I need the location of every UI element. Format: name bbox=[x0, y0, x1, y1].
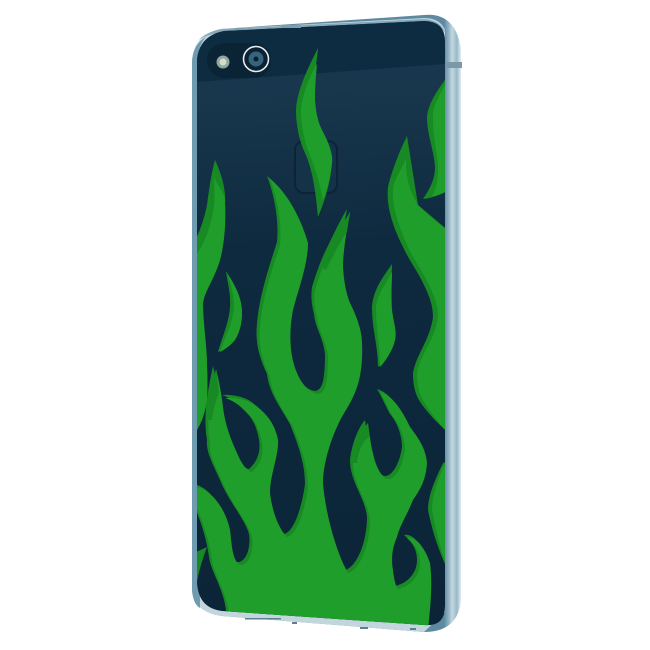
phone back panel bbox=[197, 21, 445, 625]
flame shadow layer bbox=[185, 48, 450, 627]
flame shadow tips bbox=[208, 212, 369, 463]
top camera band bbox=[197, 15, 445, 82]
lower edge buttons and ports bbox=[245, 618, 416, 630]
icon: flash bbox=[216, 56, 230, 68]
icon: camera lens bbox=[244, 46, 268, 72]
fingerprint sensor bbox=[295, 141, 337, 193]
flame main layer bbox=[190, 64, 450, 630]
flame artwork bbox=[185, 48, 450, 630]
top edge buttons bbox=[235, 25, 301, 30]
camera module bbox=[207, 43, 271, 78]
clear case outer shell bbox=[192, 15, 462, 632]
phone case product illustration bbox=[192, 14, 462, 632]
